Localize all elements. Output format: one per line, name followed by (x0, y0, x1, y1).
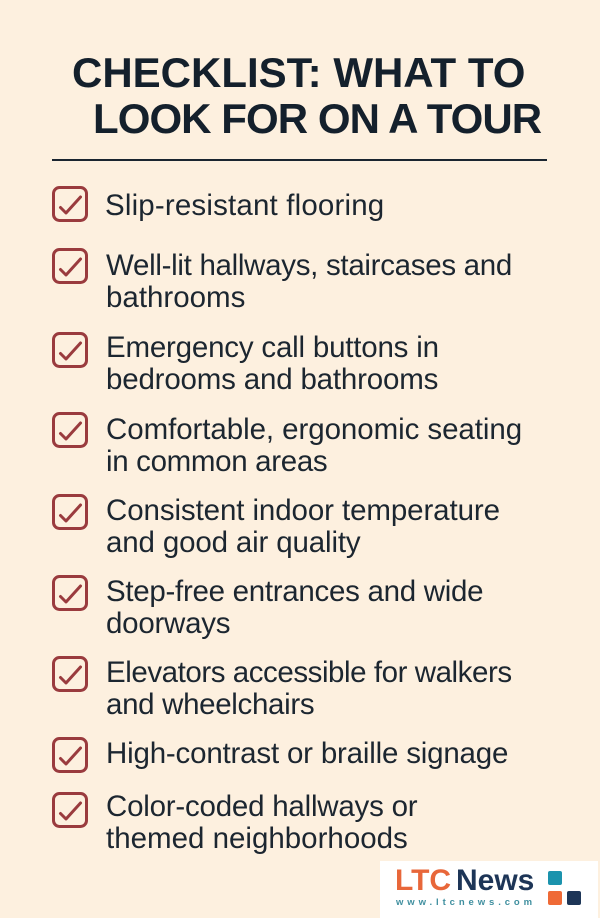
title: LOOK FOR ON A TOUR (93, 95, 541, 142)
checklist item: elevators: and wheelchairs (106, 688, 314, 721)
checklist item: seating (52, 412, 522, 478)
title: CHECKLIST: WHAT TO (72, 49, 525, 96)
checklist item: entrances (52, 575, 483, 640)
checklist item: lighting (52, 248, 512, 314)
checklist item: entrances: Step-free entrances and wide (106, 575, 483, 608)
checklist item: temperature: Consistent indoor temperature (106, 494, 500, 527)
checklist item: temperature (52, 494, 500, 559)
checklist item: elevators (52, 656, 512, 721)
checklist item: signage: High-contrast or braille signage (106, 737, 508, 770)
logo: LTC News (380, 861, 598, 918)
logo: LTC News: LTC (395, 864, 451, 897)
logo: LTC News: News (456, 864, 534, 897)
checklist item: lighting: Well-lit hallways, staircases and (106, 249, 512, 282)
checklist item: call buttons: bedrooms and bathrooms (106, 363, 438, 396)
checklist item: entrances: doorways (106, 607, 230, 640)
title (72, 49, 542, 142)
checklist item: elevators: Elevators accessible for walkers (106, 656, 512, 689)
checklist item: temperature: and good air quality (106, 526, 360, 559)
logo: LTC News: www.ltcnews.com (396, 897, 536, 908)
checklist item: lighting: bathrooms (106, 281, 245, 314)
checklist item: hallways: Color-coded hallways or (106, 790, 417, 823)
divider (52, 159, 547, 161)
checklist item: call buttons: Emergency call buttons in (106, 331, 439, 364)
checklist item: call buttons (52, 331, 439, 396)
checklist item: seating: in common areas (106, 445, 327, 478)
checklist item: seating: Comfortable, ergonomic seating (106, 413, 522, 446)
checklist item: hallways: themed neighborhoods (106, 822, 408, 855)
checklist item: hallways (52, 790, 418, 855)
checklist item: flooring: Slip-resistant flooring (105, 189, 384, 222)
